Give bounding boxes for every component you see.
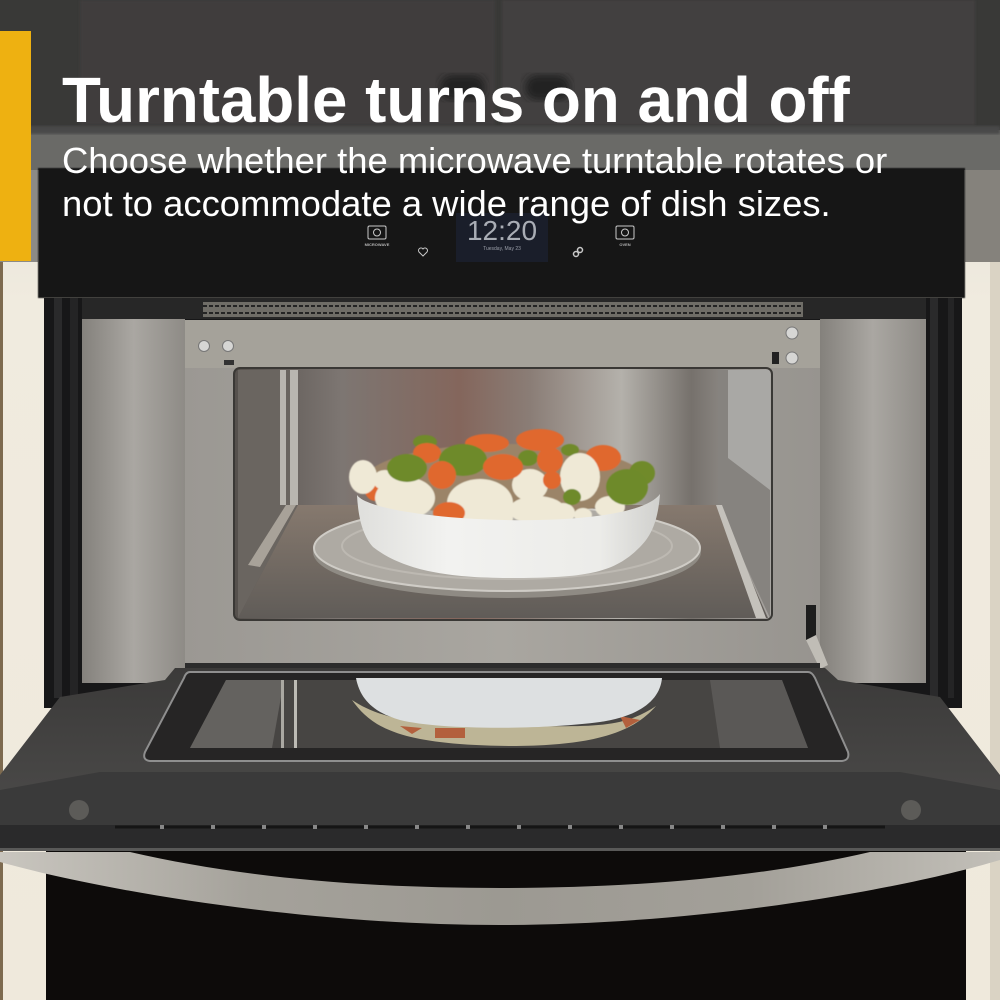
heading: Turntable turns on and off	[62, 65, 850, 136]
description text	[62, 140, 887, 224]
door front edge	[0, 772, 1000, 828]
lower oven	[46, 851, 966, 1000]
open door	[0, 668, 1000, 851]
icon: favourite	[419, 248, 428, 256]
accent bar	[0, 31, 31, 261]
clock display: 12:20	[467, 215, 537, 246]
vent	[203, 302, 803, 317]
oven button: OVEN	[619, 242, 631, 247]
turntable glass plate	[313, 505, 701, 598]
oven cavity surround	[44, 298, 962, 708]
white dish	[357, 494, 660, 578]
icon: connectivity	[574, 248, 582, 256]
microwave button	[365, 226, 390, 247]
microwave button: MICROWAVE	[365, 242, 390, 247]
microwave interior	[234, 368, 772, 620]
dish reflection	[352, 678, 662, 746]
food	[349, 429, 655, 528]
door handle	[0, 852, 1000, 925]
oven button	[616, 226, 634, 247]
oven control panel	[38, 168, 965, 298]
description text: Choose whether the microwave turntable rotates or	[62, 140, 887, 181]
door window	[144, 672, 848, 761]
microwave frame	[185, 320, 828, 669]
clock display: Tuesday, May 23	[483, 246, 521, 252]
clock display	[456, 213, 548, 262]
description text: not to accommodate a wide range of dish sizes.	[62, 183, 831, 224]
